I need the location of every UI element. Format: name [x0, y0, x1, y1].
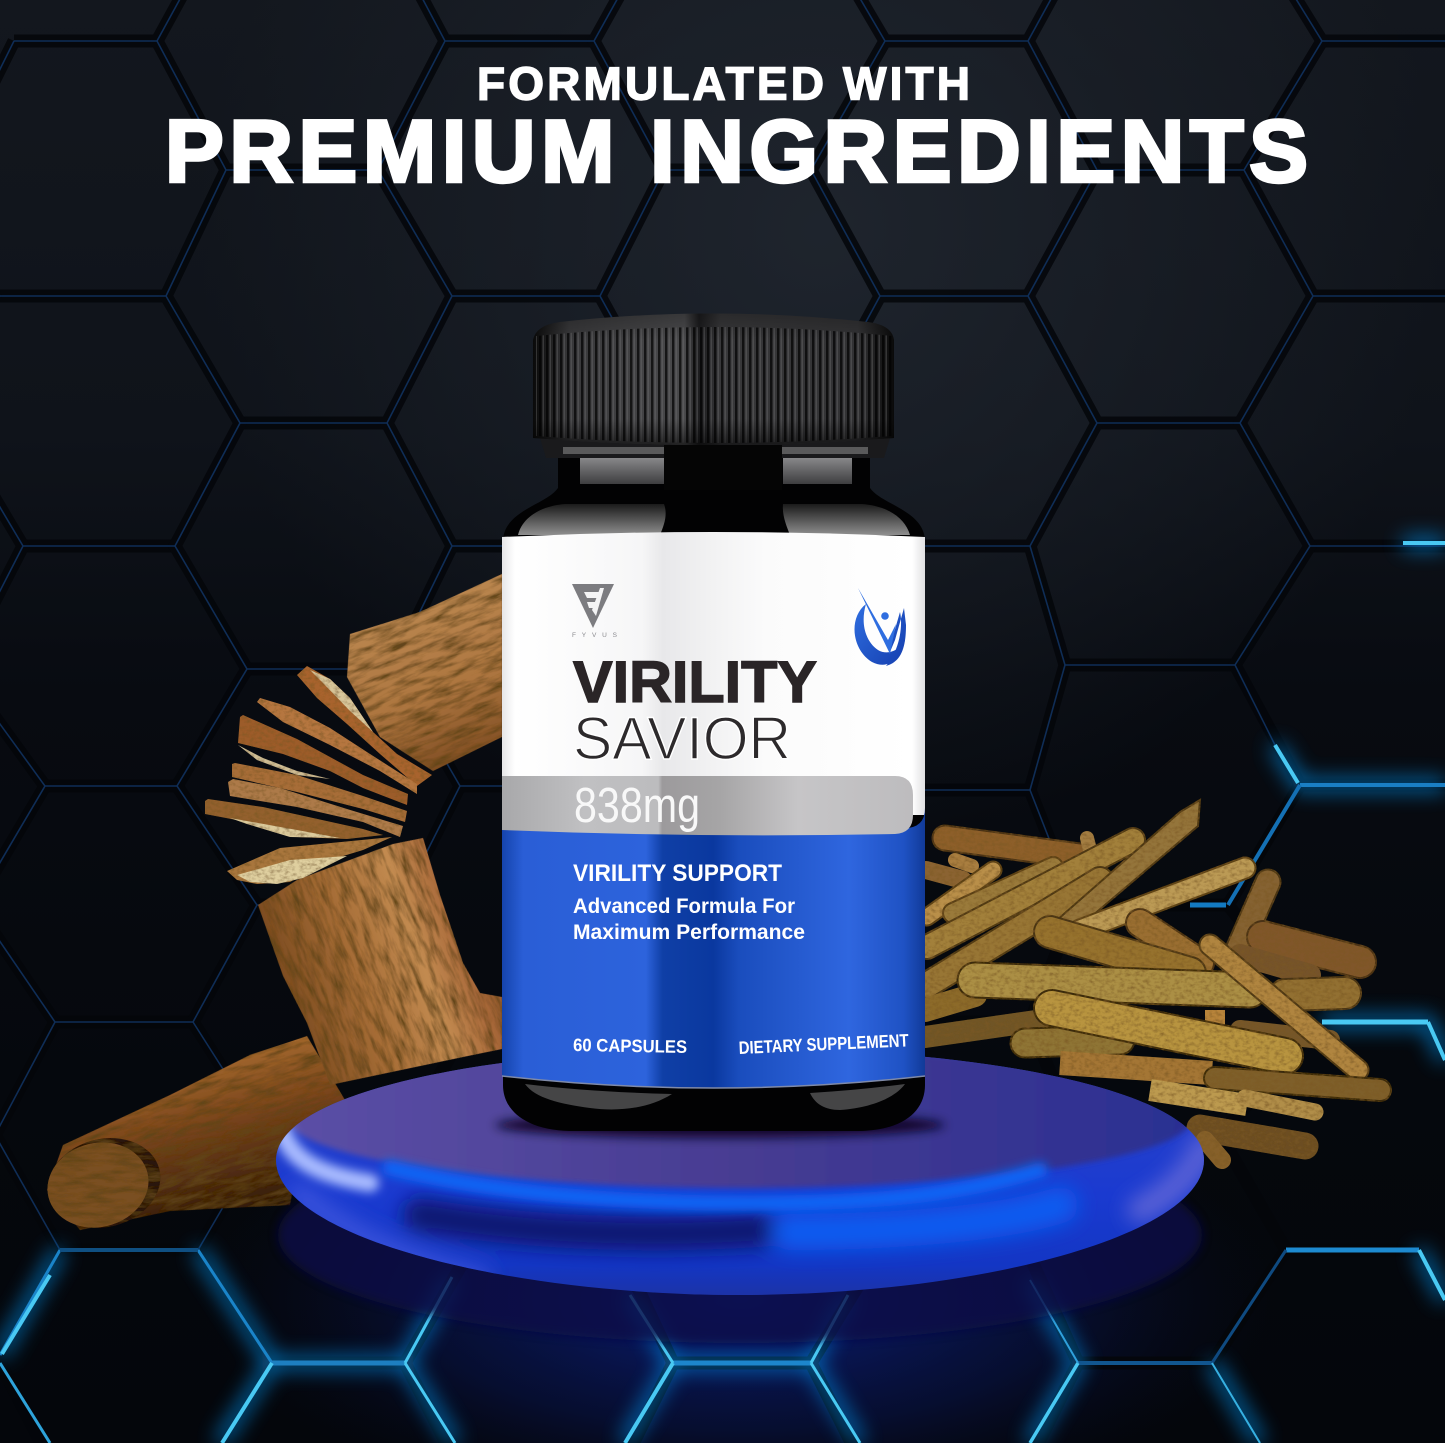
podium reflection	[278, 1127, 1202, 1343]
label footer	[573, 1030, 909, 1058]
product name: SAVIOR	[573, 705, 791, 772]
lower root	[0, 948, 402, 1318]
podium surface and lighting	[282, 1048, 1205, 1280]
label white panel	[502, 532, 925, 815]
root end cap	[38, 1127, 170, 1239]
upper root chunk	[279, 520, 570, 825]
title line 2: PREMIUM INGREDIENTS	[165, 102, 1308, 200]
label claims: Advanced Formula For	[573, 895, 795, 918]
title line 1: FORMULATED WITH	[477, 58, 970, 110]
label grey strength band	[502, 776, 913, 835]
ingredient: tongkat ali root with slices	[0, 520, 588, 1318]
label claims: VIRILITY SUPPORT	[573, 860, 782, 887]
product name	[573, 650, 817, 772]
podium	[276, 1048, 1205, 1343]
product bottle	[502, 314, 925, 1131]
podium top surface	[288, 1048, 1192, 1188]
label claims	[573, 860, 805, 944]
root slices	[205, 666, 432, 884]
podium body	[276, 1048, 1204, 1295]
ingredient: ashwagandha root pile	[925, 800, 1380, 1160]
bottle contact shadow	[495, 1112, 945, 1138]
label footer: DIETARY SUPPLEMENT	[738, 1030, 909, 1058]
product name: VIRILITY	[573, 650, 817, 715]
upright root cylinder	[172, 753, 588, 1170]
brand logo: FYVUS	[572, 584, 618, 639]
label blue panel	[502, 808, 925, 1088]
brand logo: FYVUS: FYVUS	[572, 632, 618, 639]
brand logo: blue swoosh figure	[855, 587, 906, 666]
label claims: Maximum Performance	[573, 921, 805, 944]
label base rim	[502, 1076, 925, 1088]
podium bright band	[390, 1168, 1040, 1203]
bottle shoulder and neck	[503, 438, 925, 1131]
glowing hexagon edges	[0, 543, 1445, 1443]
base highlights	[525, 1084, 905, 1110]
title	[165, 58, 1308, 200]
label footer: 60 CAPSULES	[573, 1035, 687, 1057]
podium side lights	[300, 1145, 1205, 1280]
podium left rim highlight	[282, 1130, 370, 1183]
bottle cap	[533, 314, 894, 445]
strength 838mg: 838mg	[574, 779, 700, 833]
